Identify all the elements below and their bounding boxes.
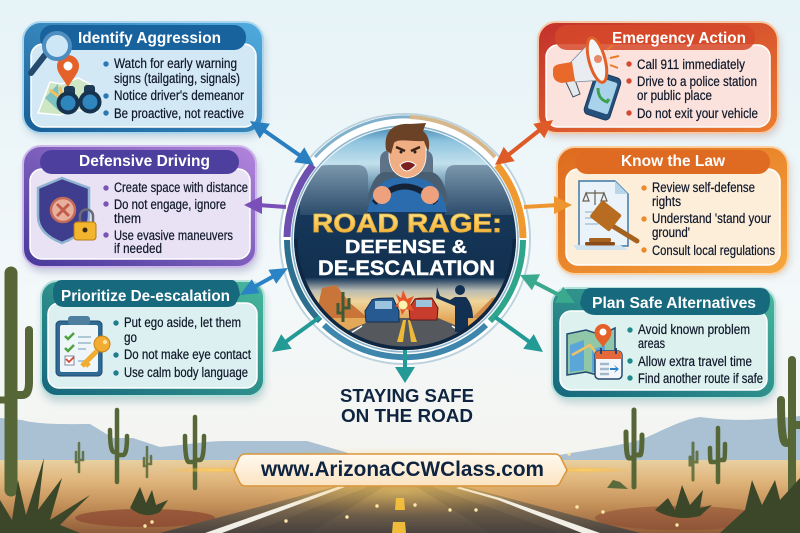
illustration: traffic and driver <box>300 150 512 215</box>
heading: Plan Safe Alternatives <box>592 295 756 312</box>
arrow: teal lower left <box>272 317 320 352</box>
bullet list: Drive to a police station <box>637 74 757 89</box>
bullet list: Understand 'stand your <box>652 211 771 226</box>
bullet list <box>113 315 251 380</box>
arrow: down to slogan <box>395 350 415 383</box>
bullet list: Notice driver's demeanor <box>114 88 244 103</box>
bullet list: Review self-defense <box>652 180 755 195</box>
illustration: driver head <box>386 123 429 178</box>
bullet list: rights <box>652 194 681 209</box>
bullet list: Create space with distance <box>114 180 248 195</box>
bullet list: Use evasive maneuvers <box>114 228 233 243</box>
bullet list: Find another route if safe <box>638 371 763 386</box>
slogan: ON THE ROAD <box>341 406 473 426</box>
arrow: plan safe alternatives <box>520 274 575 303</box>
icon: map, pin and calendar <box>567 324 622 379</box>
panel: defensive driving <box>23 146 258 272</box>
bullet list: Do not exit your vehicle <box>637 106 758 121</box>
cactus group: left desert <box>76 410 204 488</box>
slogan <box>340 386 474 426</box>
bullet list: Do not engage, ignore <box>114 197 226 212</box>
header bar <box>580 288 770 315</box>
bullet list: Consult local regulations <box>652 243 775 258</box>
bullet list <box>103 180 248 256</box>
panel: identify aggression <box>23 22 265 137</box>
outer ring <box>280 114 530 364</box>
heading: Prioritize De-escalation <box>61 288 230 305</box>
website banner: www.ArizonaCCWClass.com <box>260 458 544 481</box>
arrow: teal lower right <box>495 317 543 352</box>
bullet list <box>641 180 775 258</box>
icon: megaphone and phone <box>553 36 622 121</box>
bullet list: go <box>124 330 137 345</box>
arrow: defensive driving <box>244 196 286 214</box>
heading: Emergency Action <box>612 30 746 47</box>
bullet list: Put ego aside, let them <box>124 315 241 330</box>
bullet list: Call 911 immediately <box>637 57 745 72</box>
panel: plan safe alternatives <box>552 288 776 403</box>
bullet list: areas <box>638 336 665 351</box>
arrow: emergency action <box>495 120 553 165</box>
hub title: DE-ESCALATION <box>318 257 495 280</box>
hub title: ROAD RAGE: <box>312 210 502 238</box>
header bar <box>40 25 246 50</box>
heading: Identify Aggression <box>78 30 221 47</box>
website banner <box>165 446 635 494</box>
header bar <box>53 280 240 307</box>
panel: emergency action <box>538 22 780 137</box>
heading: Know the Law <box>621 153 726 170</box>
bullet list: them <box>114 211 141 226</box>
bullet list <box>103 56 244 121</box>
bullet list: or public place <box>637 88 712 103</box>
bullet list <box>626 57 758 121</box>
bullet list: Do not make eye contact <box>124 347 251 362</box>
bullet list: Be proactive, not reactive <box>114 106 244 121</box>
cactus group: right desert <box>626 360 800 495</box>
hub title: DEFENSE & <box>345 236 467 257</box>
arrows between hub and panels <box>240 120 575 383</box>
arrow: prioritize de-escalation <box>240 268 288 295</box>
bullet list <box>627 322 763 386</box>
bullet list: signs (tailgating, signals) <box>114 71 240 86</box>
panel: know the law <box>557 147 790 276</box>
bullet list: Watch for early warning <box>114 56 237 71</box>
desert shrubs <box>0 458 800 533</box>
icon: clipboard and key <box>56 316 110 376</box>
panel: prioritize de-escalation <box>41 280 265 402</box>
bullet list: Allow extra travel time <box>638 354 752 369</box>
bullet list: Use calm body language <box>124 365 248 380</box>
cactus: tall left <box>0 273 29 490</box>
bullet list: Avoid known problem <box>638 322 750 337</box>
illustration: desert roadside scene <box>290 239 520 350</box>
arrow: know the law <box>524 196 572 214</box>
icon: shield and padlock <box>38 178 96 243</box>
header bar <box>40 150 239 174</box>
slogan: STAYING SAFE <box>340 386 474 406</box>
icon: legal document and gavel <box>573 181 637 250</box>
bullet list: if needed <box>114 241 162 256</box>
hub title <box>312 210 502 280</box>
bullet list: ground' <box>652 225 690 240</box>
arrow: identify aggression <box>250 121 314 165</box>
header bar <box>575 150 770 174</box>
header bar <box>555 25 755 50</box>
central hub badge <box>280 114 530 364</box>
icon: magnifier, map and binoculars <box>31 33 100 115</box>
heading: Defensive Driving <box>79 153 210 170</box>
